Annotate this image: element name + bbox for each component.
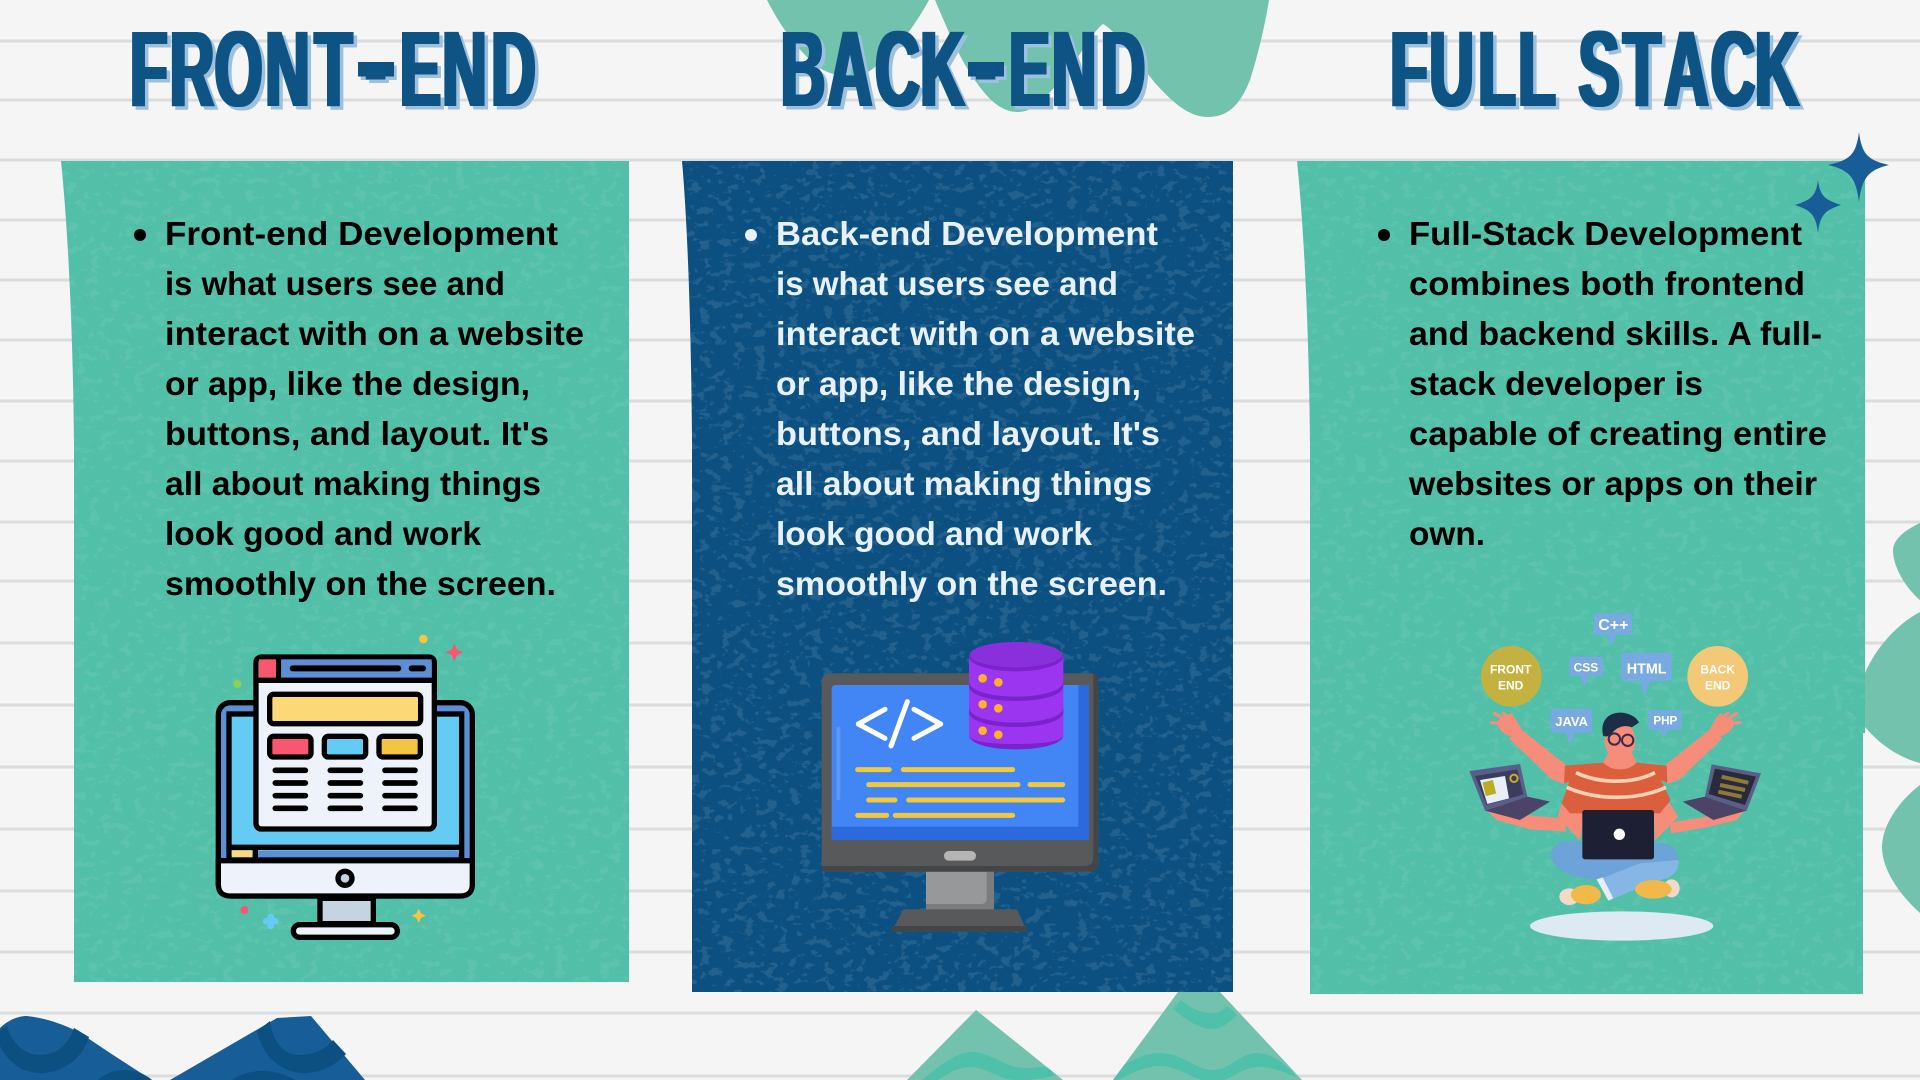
front-end description <box>134 215 584 602</box>
back-end description: buttons, and layout. It's <box>776 415 1160 452</box>
icon: multitasking full-stack developer <box>1469 613 1761 941</box>
full stack description: and backend skills. A full- <box>1409 315 1822 352</box>
panel: front-end <box>61 161 629 982</box>
front-end description: smoothly on the screen. <box>165 565 556 602</box>
back-end description: smoothly on the screen. <box>776 565 1167 602</box>
heading: FRONT-END: FRONT-END <box>130 3 536 129</box>
icon: multitasking full-stack developer: PHP <box>1653 715 1678 728</box>
front-end description: all about making things <box>165 465 541 502</box>
heading: BACK-END: BACK-END <box>784 6 1149 133</box>
back-end description: all about making things <box>776 465 1152 502</box>
front-end description: look good and work <box>165 515 482 552</box>
icon: multitasking full-stack developer: END <box>1705 678 1731 692</box>
icon: multitasking full-stack developer: JAVA <box>1555 714 1589 729</box>
decorative blobs: right teal <box>1865 523 1920 913</box>
heading: FRONT-END: FRONT-END <box>134 6 539 133</box>
icon: desktop monitor with web page layout <box>218 635 472 937</box>
icon: small sparkle star <box>1795 180 1841 233</box>
icon: multitasking full-stack developer: BACK <box>1700 662 1735 676</box>
icon: large sparkle star <box>1828 132 1889 202</box>
decorative shape: bottom teal triangles with waves <box>907 992 1302 1080</box>
icon: multitasking full-stack developer: FRONT <box>1490 662 1532 676</box>
icon: monitor with code and database <box>822 642 1098 932</box>
front-end description: buttons, and layout. It's <box>165 415 549 452</box>
full stack description: websites or apps on their <box>1408 465 1817 502</box>
icon: multitasking full-stack developer: C++ <box>1598 617 1628 634</box>
full stack description: own. <box>1409 515 1485 552</box>
panel: back-end <box>682 161 1233 992</box>
heading: FULL STACK: FULL STACK <box>1390 8 1799 129</box>
decorative blobs: top teal <box>767 0 1269 117</box>
front-end description: is what users see and <box>165 265 505 302</box>
front-end description: interact with on a website <box>165 315 584 352</box>
full stack description: combines both frontend <box>1409 265 1805 302</box>
icon: multitasking full-stack developer: END <box>1498 678 1524 692</box>
full stack description <box>1378 215 1827 552</box>
icon: multitasking full-stack developer: HTML <box>1627 661 1667 677</box>
front-end description: or app, like the design, <box>165 365 530 402</box>
back-end description: Back-end Development <box>776 215 1158 252</box>
heading: BACK-END: BACK-END <box>781 3 1145 129</box>
front-end description: Front-end Development <box>165 215 558 252</box>
decorative shape: bottom-left navy waves <box>0 1016 365 1080</box>
back-end description: look good and work <box>776 515 1093 552</box>
back-end description: or app, like the design, <box>776 365 1141 402</box>
developer figure <box>1469 713 1761 905</box>
full stack description: Full-Stack Development <box>1409 215 1802 252</box>
panel: full stack <box>1297 161 1865 994</box>
back-end description <box>745 215 1195 602</box>
heading: FULL STACK: FULL STACK <box>1394 11 1803 133</box>
back-end description: is what users see and <box>776 265 1118 302</box>
full stack description: stack developer is <box>1409 365 1703 402</box>
icon: multitasking full-stack developer: CSS <box>1574 661 1598 675</box>
back-end description: interact with on a website <box>776 315 1195 352</box>
full stack description: capable of creating entire <box>1409 415 1827 452</box>
